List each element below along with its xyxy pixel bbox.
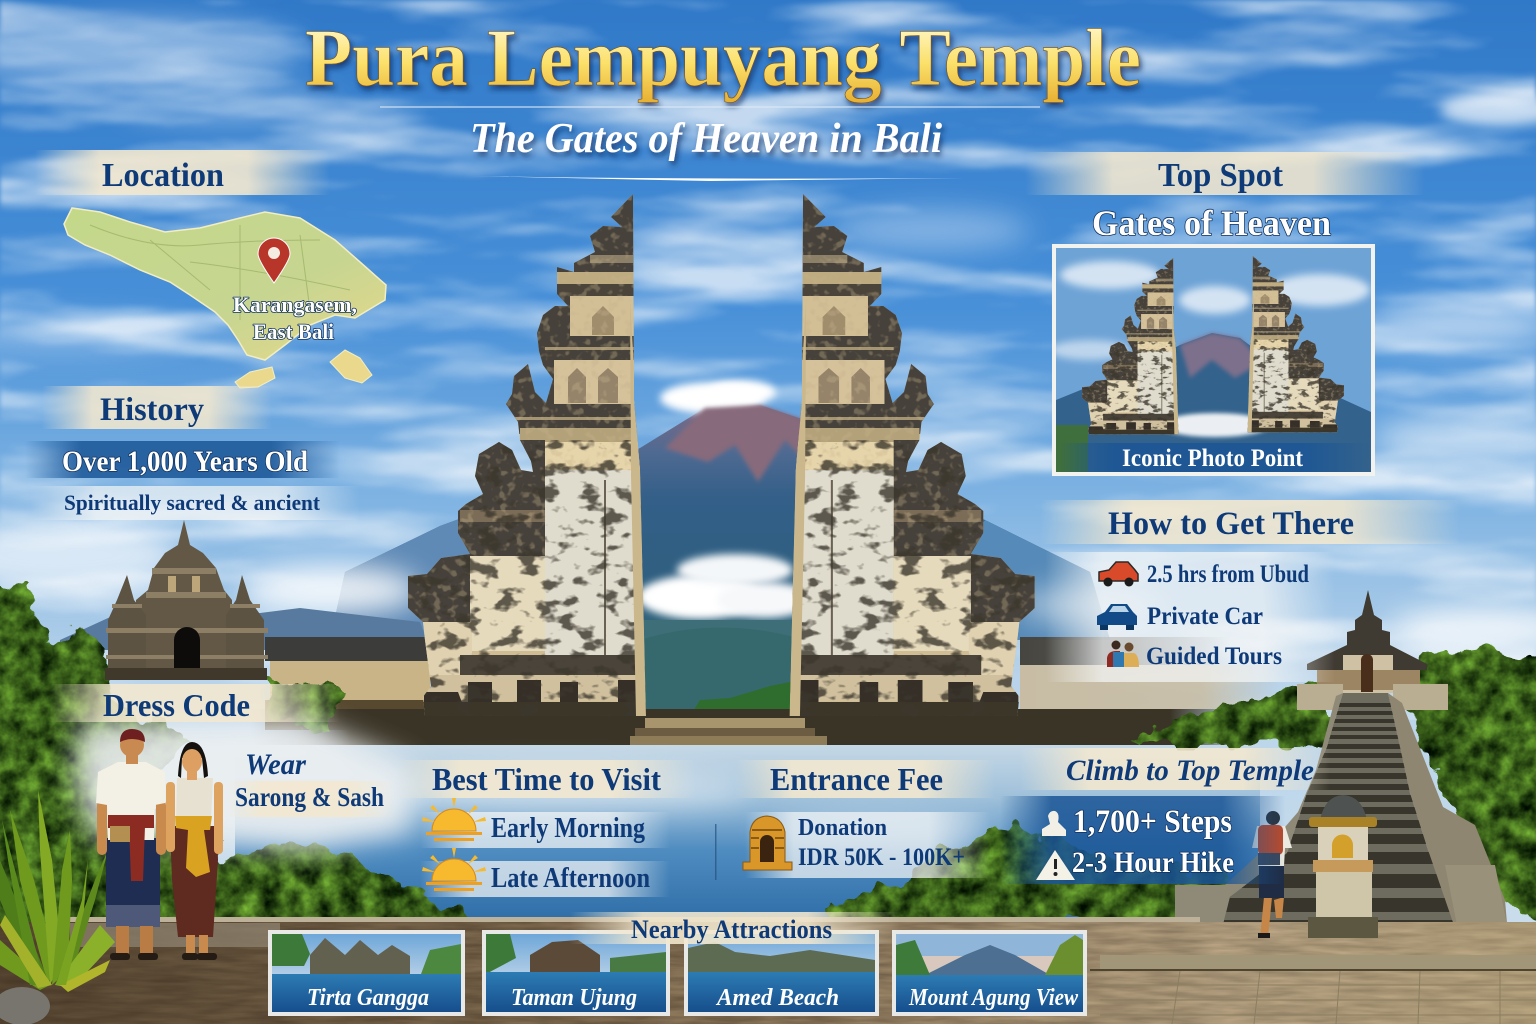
photo card: Tirta Gangga: Tirta Gangga	[307, 985, 429, 1011]
how to get there heading banner: How to Get There	[1108, 506, 1354, 542]
row: drive time: 2.5 hrs from Ubud	[1147, 561, 1309, 588]
panel: climb to top temple	[1000, 748, 1330, 884]
panel: history	[25, 386, 360, 520]
fee text	[745, 812, 990, 878]
mountain: Mount Agung	[60, 380, 1160, 717]
small stone temple, history illustration	[105, 520, 268, 680]
panel: best time to visit	[395, 760, 695, 897]
ground and paving	[0, 917, 1536, 1024]
top spot heading banner	[1025, 152, 1425, 195]
top spot heading banner: Top Spot	[1158, 157, 1284, 194]
left vegetation and trees	[0, 575, 345, 960]
panel: nearby attractions	[268, 912, 1087, 1016]
row: guided tours	[1107, 640, 1282, 670]
how to get there heading banner	[1040, 500, 1460, 544]
temple walls behind the gates	[250, 637, 1280, 745]
photo card: Amed Beach	[684, 930, 879, 1016]
fee text: IDR 50K - 100K+	[798, 844, 965, 871]
photo caption: Iconic Photo Point	[1122, 445, 1304, 472]
lower landscape: lake and water band	[235, 745, 1260, 920]
map label: Karangasem,	[233, 292, 357, 317]
row: early morning	[420, 798, 670, 848]
photo card: Amed Beach: Amed Beach	[715, 985, 839, 1011]
rock	[0, 987, 50, 1024]
icon: rising sun	[422, 798, 486, 841]
photo card: Taman Ujung	[482, 930, 670, 1016]
photo card: Mount Agung View	[892, 930, 1087, 1016]
climb heading banner	[1020, 748, 1330, 790]
icon: map pin	[258, 238, 290, 283]
row: private car: Private Car	[1147, 603, 1263, 630]
row: late afternoon: Late Afternoon	[491, 863, 650, 894]
climb stats backdrop	[1000, 796, 1285, 884]
row: guided tours: Guided Tours	[1146, 643, 1282, 670]
spiky foreground plant	[0, 790, 115, 992]
row: early morning: Early Morning	[491, 813, 645, 844]
row: drive time	[1099, 561, 1309, 588]
row: hike time: 2-3 Hour Hike	[1072, 846, 1234, 879]
left gate of the split temple gateway	[400, 190, 646, 720]
panel: top spot	[1025, 152, 1425, 476]
man in temple dress	[96, 729, 166, 960]
location heading banner	[35, 150, 330, 195]
woman in temple dress	[166, 742, 223, 960]
history heading banner: History	[100, 392, 204, 428]
hazy dress code panel backdrop	[75, 718, 410, 850]
sarong and sash text: Sarong & Sash	[235, 782, 384, 812]
central stone steps	[630, 718, 827, 745]
icon: blue car	[1097, 604, 1137, 630]
top spot subheading: Gates of Heaven	[1092, 203, 1331, 243]
photo card: Taman Ujung: Taman Ujung	[511, 985, 637, 1011]
photo card: Tirta Gangga	[268, 930, 465, 1016]
title: Pura Lempuyang Temple	[305, 12, 1141, 103]
nearby attractions heading: Nearby Attractions	[631, 915, 832, 944]
subtitle underline	[470, 176, 965, 181]
age callout: Over 1,000 Years Old	[62, 445, 308, 478]
lower landscape: tree lines	[215, 650, 1536, 930]
transport list backdrop	[1045, 552, 1335, 682]
wear text: Wear	[245, 748, 306, 781]
map label	[233, 292, 357, 344]
photo: gates of heaven	[1050, 244, 1375, 476]
dress code heading banner: Dress Code	[103, 687, 250, 723]
climb heading banner: Climb to Top Temple	[1066, 754, 1314, 787]
entrance fee heading banner: Entrance Fee	[770, 761, 943, 797]
row: private car	[1097, 603, 1263, 630]
hiker climbing steps	[1252, 811, 1292, 938]
column divider	[715, 824, 716, 880]
panel: entrance fee	[735, 760, 995, 878]
best time heading banner: Best Time to Visit	[432, 761, 661, 797]
icon: setting sun	[422, 848, 486, 891]
photo caption	[1060, 443, 1370, 472]
panel: how to get there	[1040, 500, 1460, 682]
row: late afternoon	[420, 848, 670, 897]
entrance fee heading banner	[735, 760, 995, 798]
icon: golden gate	[743, 816, 792, 870]
history description: Spiritually sacred & ancient	[64, 490, 321, 515]
dress code heading banner	[50, 684, 340, 723]
icon: warning triangle	[1036, 850, 1075, 880]
subtitle: The Gates of Heaven in Bali	[470, 116, 942, 162]
decorative subtitle rule	[380, 106, 1040, 108]
photo card: Mount Agung View: Mount Agung View	[908, 985, 1079, 1011]
icon: tour guides	[1107, 640, 1139, 667]
roadside shrine on the stairs	[1308, 795, 1378, 938]
location heading banner: Location	[102, 157, 224, 194]
icon: hiker silhouette	[1042, 811, 1066, 836]
map of Bali	[64, 208, 386, 388]
row: steps: 1,700+ Steps	[1073, 804, 1232, 840]
panel: dress code	[50, 684, 395, 817]
map label: East Bali	[253, 319, 334, 344]
fee text: Donation	[798, 815, 887, 841]
right gate of the split temple gateway	[790, 190, 1043, 720]
nearby attractions heading	[570, 912, 900, 944]
history description	[30, 486, 360, 520]
icon: red car	[1099, 562, 1138, 586]
panel: location	[35, 150, 386, 388]
right hilltop temple	[1297, 590, 1448, 710]
history heading banner	[42, 386, 272, 429]
stairway to the top temple	[1175, 693, 1507, 922]
